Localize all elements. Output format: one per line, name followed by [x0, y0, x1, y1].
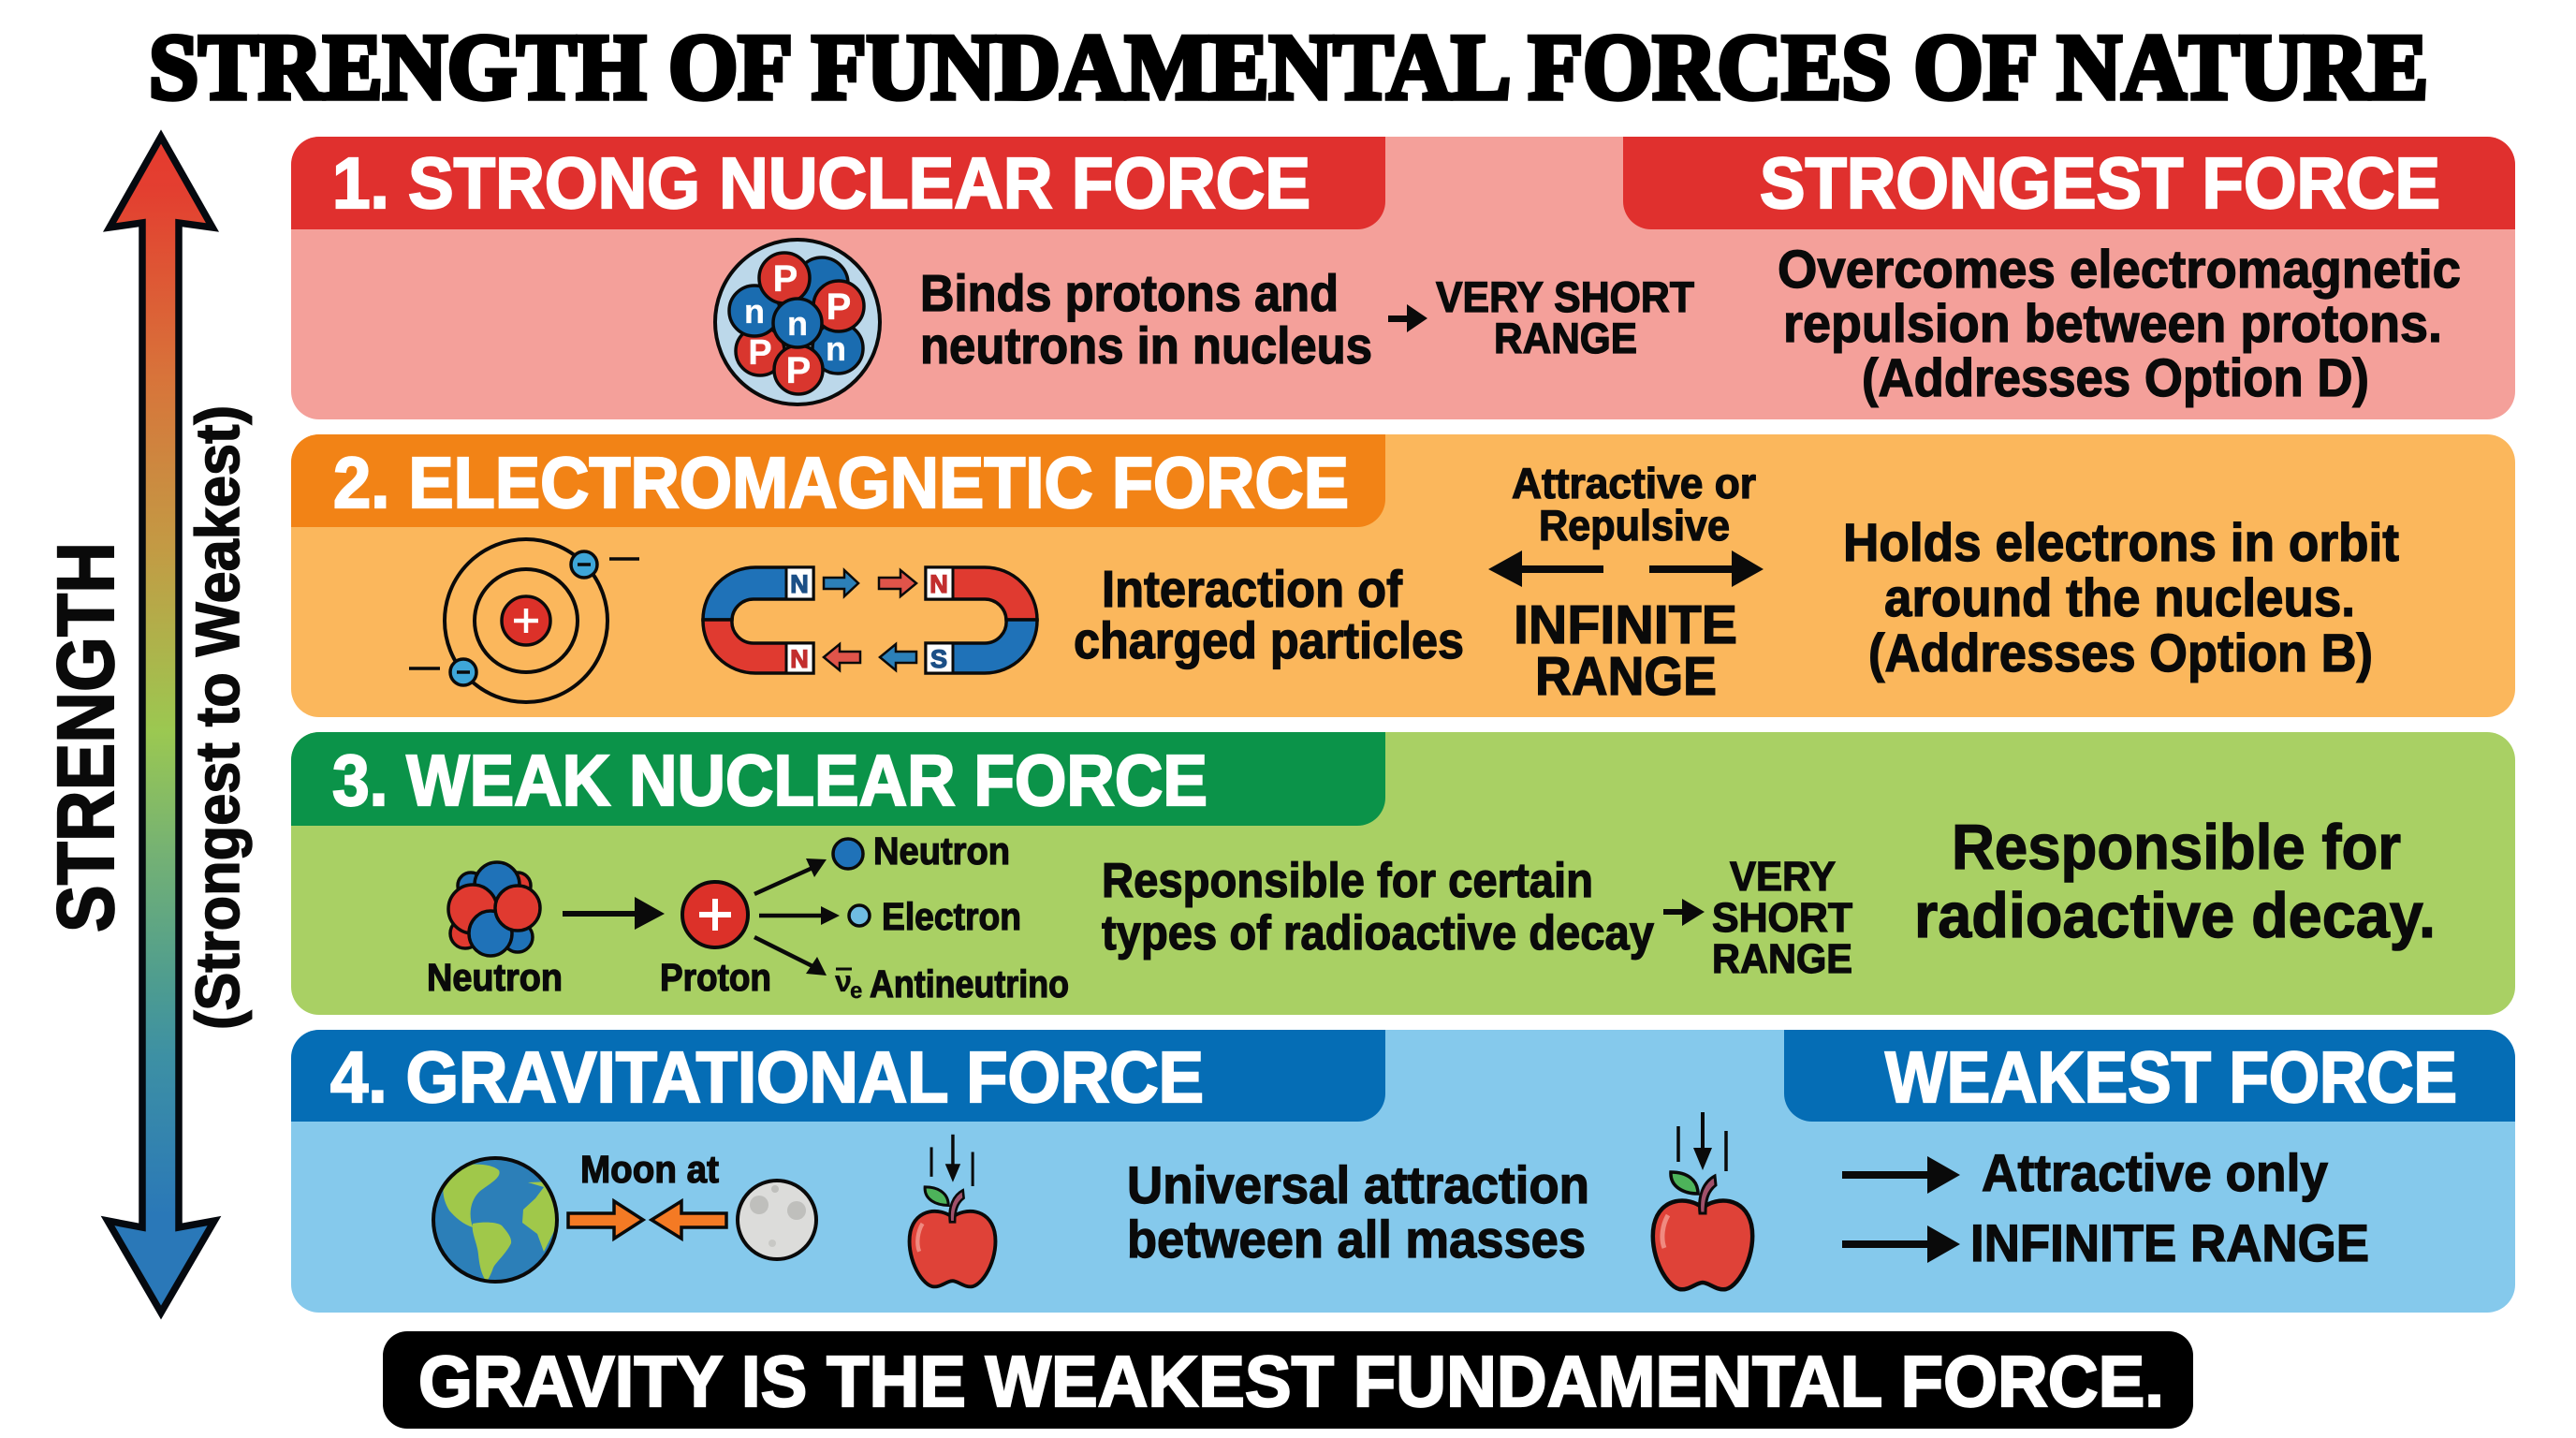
banner text: GRAVITY IS THE WEAKEST FUNDAMENTAL FORCE.	[418, 1342, 2164, 1422]
panel: weak nuclear force	[291, 732, 2515, 1015]
header tab	[291, 434, 1385, 527]
note: (Addresses Option B)	[1868, 624, 2373, 683]
product: antineutrino: Antineutrino	[870, 962, 1069, 1005]
range label: VERY SHORT	[1436, 272, 1694, 321]
label: infinite range: INFINITE RANGE	[1970, 1213, 2369, 1272]
icon: earth	[433, 1158, 562, 1292]
description: charged particles	[1074, 611, 1464, 669]
description: Universal attraction	[1127, 1155, 1589, 1214]
axis label: strength: STRENGTH	[41, 542, 131, 932]
icon: magnets: N	[790, 570, 809, 598]
header tab	[291, 732, 1385, 826]
icon: nucleus: P	[827, 286, 851, 328]
icon: magnets: N	[929, 570, 948, 598]
description	[920, 264, 1372, 374]
note: (Addresses Option D)	[1862, 348, 2369, 408]
decay arrows	[754, 858, 840, 976]
description	[1074, 560, 1464, 669]
product: antineutrino: ν	[835, 964, 852, 998]
icon: proton	[682, 882, 748, 947]
range label	[1514, 594, 1737, 707]
icon: nucleus: n	[744, 292, 765, 330]
icon: nucleus: n	[787, 304, 808, 343]
arrow	[1663, 899, 1705, 926]
description: Interaction of	[1102, 560, 1403, 618]
icon: falling apple large	[1653, 1112, 1752, 1289]
product: electron: Electron	[882, 895, 1021, 938]
range label: RANGE	[1494, 314, 1637, 362]
strongest tab	[1623, 137, 2515, 229]
product: antineutrino: e	[850, 978, 862, 1004]
conclusion banner	[383, 1331, 2193, 1429]
attractive or repulsive label	[1512, 459, 1756, 550]
range label: INFINITE	[1514, 594, 1737, 655]
panel background	[291, 1030, 2515, 1313]
label: proton: Proton	[660, 956, 771, 999]
description	[1127, 1155, 1589, 1269]
double arrow	[1488, 550, 1764, 587]
icon: moon	[738, 1181, 816, 1259]
note	[1778, 240, 2461, 408]
range label: RANGE	[1712, 936, 1852, 982]
description	[1102, 854, 1654, 961]
icon: nucleus	[715, 240, 880, 404]
icon: magnets: S	[930, 645, 947, 673]
range label	[1712, 854, 1852, 982]
note: radioactive decay.	[1914, 880, 2436, 951]
banner background	[383, 1331, 2193, 1429]
strength arrow	[108, 137, 214, 1313]
heading: 4. GRAVITATIONAL FORCE	[330, 1037, 1204, 1118]
axis label: strongest to weakest: (Strongest to Weakest)	[183, 405, 252, 1030]
description: Binds protons and	[920, 264, 1339, 322]
note: Holds electrons in orbit	[1843, 513, 2399, 573]
icon: falling apple	[910, 1135, 995, 1286]
heading: 1. STRONG NUCLEAR FORCE	[332, 143, 1310, 224]
range label: SHORT	[1712, 895, 1852, 941]
note	[1914, 812, 2436, 951]
heading: 3. WEAK NUCLEAR FORCE	[332, 741, 1208, 821]
range label: RANGE	[1535, 646, 1717, 707]
note: repulsion between protons.	[1783, 294, 2442, 354]
panel background	[291, 732, 2515, 1015]
note: Overcomes electromagnetic	[1778, 240, 2461, 300]
note	[1843, 513, 2399, 683]
icon: nucleus: n	[826, 330, 846, 368]
panel: gravitational force	[291, 1030, 2515, 1313]
header tab	[291, 1030, 1385, 1122]
panel: strong nuclear force	[291, 137, 2515, 419]
panel background	[291, 434, 2515, 717]
note: Responsible for	[1952, 812, 2401, 883]
panel background	[291, 137, 2515, 419]
heading: weakest force: WEAKEST FORCE	[1885, 1037, 2457, 1118]
weakest tab	[1784, 1030, 2515, 1122]
label: neutron: Neutron	[427, 956, 563, 999]
arrow: infinite range	[1842, 1225, 1960, 1263]
icon: nucleus: P	[748, 333, 772, 373]
arrow	[563, 897, 665, 930]
header tab	[291, 137, 1385, 229]
attractive or repulsive label: Repulsive	[1539, 501, 1730, 550]
description: neutrons in nucleus	[920, 316, 1372, 374]
attractive or repulsive label: Attractive or	[1512, 459, 1756, 507]
title: STRENGTH OF FUNDAMENTAL FORCES OF NATURE	[149, 15, 2428, 119]
note: around the nucleus.	[1884, 568, 2355, 628]
description: between all masses	[1127, 1210, 1586, 1269]
icon: nucleus: P	[786, 350, 811, 391]
arrow	[1388, 304, 1427, 332]
heading: strongest force: STRONGEST FORCE	[1760, 143, 2440, 224]
attraction arrows	[568, 1201, 726, 1239]
icon: magnets	[703, 567, 1037, 673]
heading: 2. ELECTROMAGNETIC FORCE	[333, 443, 1349, 523]
icon: magnets: N	[790, 645, 809, 673]
panel: electromagnetic force	[291, 434, 2515, 717]
description: Responsible for certain	[1102, 854, 1593, 908]
icon: nucleus: P	[773, 258, 798, 300]
label: moon at: Moon at	[580, 1148, 719, 1191]
icon: atom	[409, 539, 639, 702]
range label	[1436, 272, 1694, 362]
arrow: attractive	[1842, 1156, 1960, 1194]
product: neutron: Neutron	[873, 829, 1010, 873]
icon: neutron cluster	[448, 862, 540, 956]
description: types of radioactive decay	[1102, 906, 1654, 961]
label: attractive only: Attractive only	[1982, 1143, 2328, 1202]
range label: VERY	[1730, 854, 1836, 900]
